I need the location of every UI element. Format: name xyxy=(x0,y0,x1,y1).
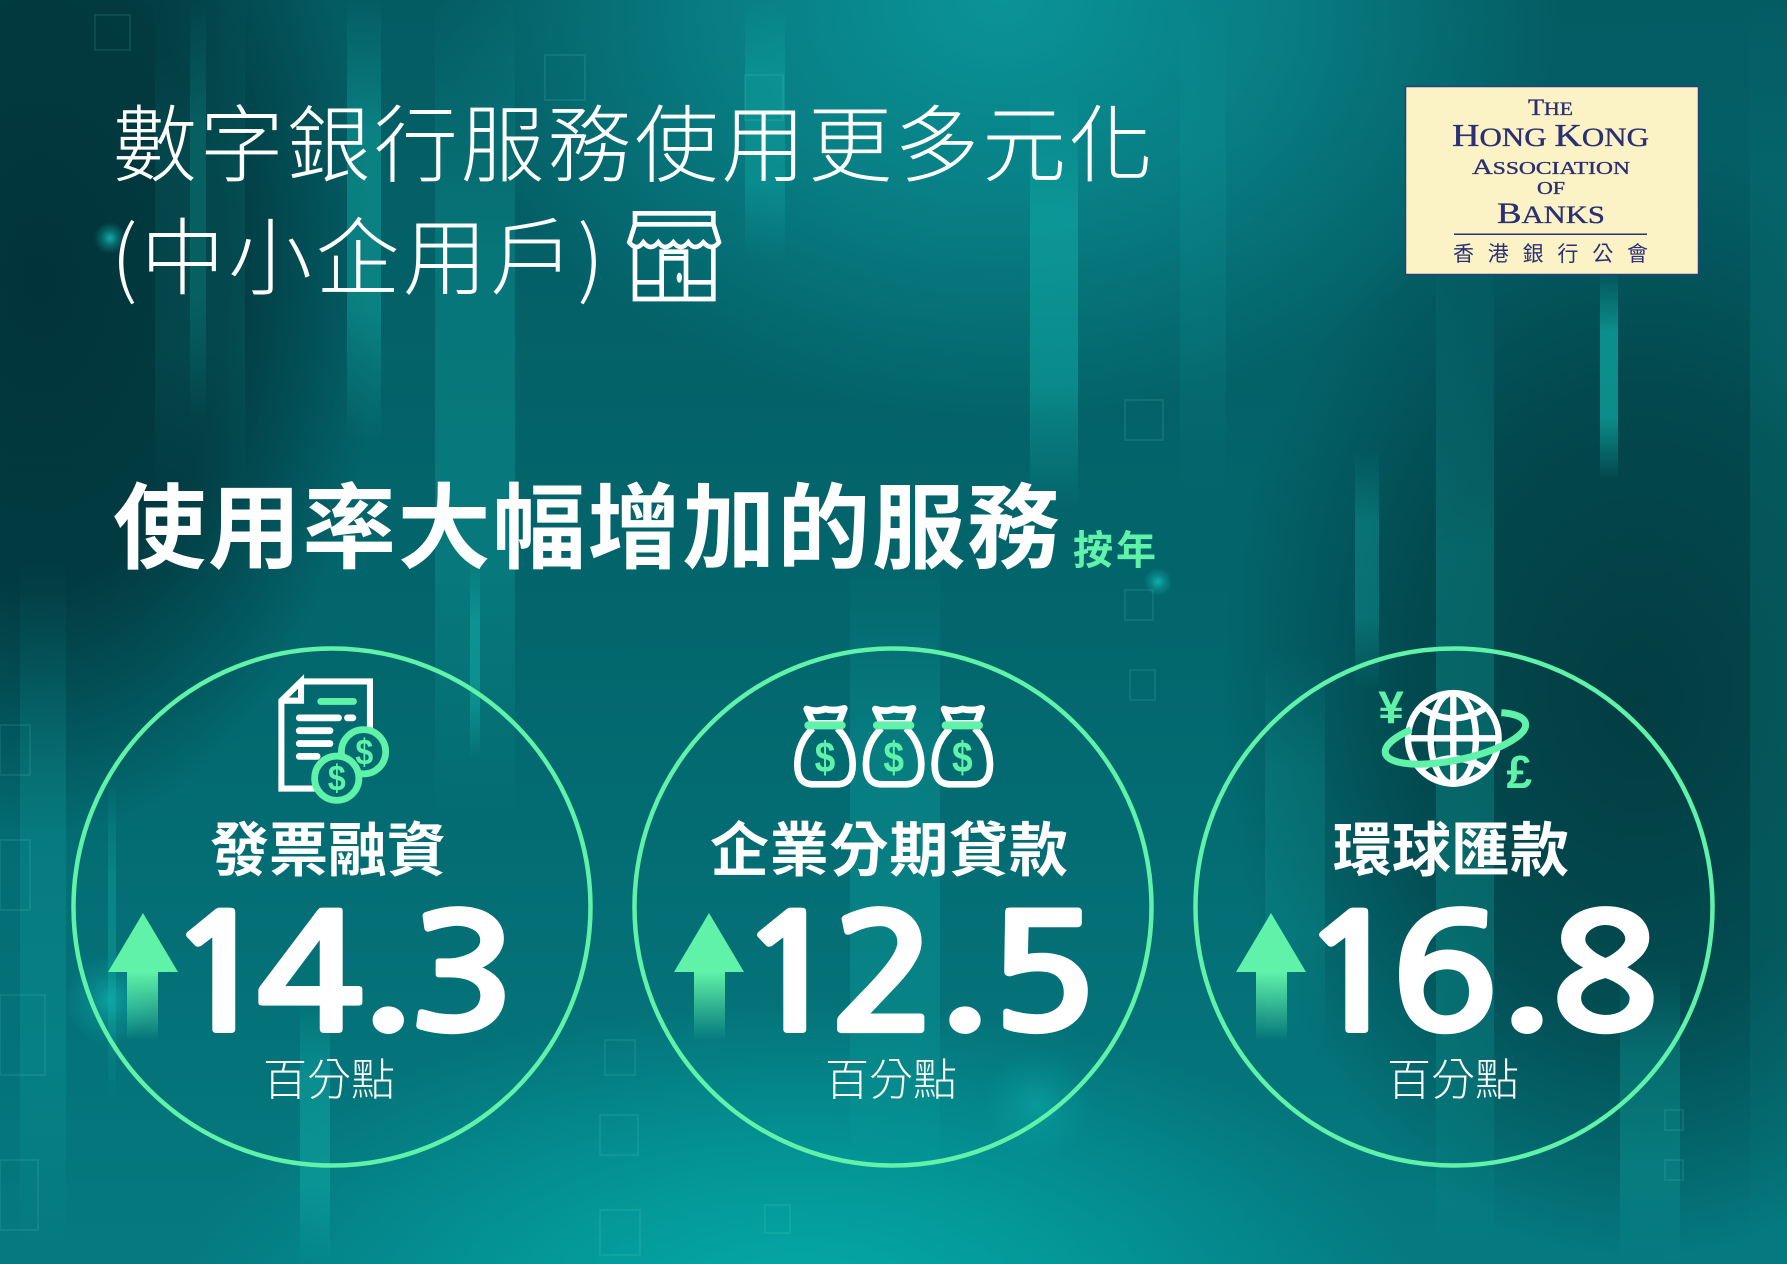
logo: OF xyxy=(1537,178,1565,198)
title: (中小企用戶) xyxy=(111,192,604,313)
logo xyxy=(1406,86,1698,274)
value: 14.3 xyxy=(164,886,518,1055)
logo: HONG KONG xyxy=(1452,117,1649,153)
label: 企業分期貸款 xyxy=(710,818,1068,884)
arrow up xyxy=(1236,913,1306,1040)
label: 發票融資 xyxy=(210,818,446,884)
title xyxy=(111,79,1153,313)
logo: BANKS xyxy=(1497,197,1605,230)
panel: global remittance xyxy=(1196,648,1712,1166)
heading note: 按年 xyxy=(1073,529,1156,573)
unit: 百分點 xyxy=(263,1056,395,1105)
icon: money bags: $ xyxy=(815,734,835,782)
label: 環球匯款 xyxy=(1333,818,1569,884)
logo: 香港銀行公會 xyxy=(1453,243,1648,266)
icon: invoice with coins xyxy=(281,681,386,800)
icon: invoice with coins: $ xyxy=(355,732,373,772)
panel: invoice financing xyxy=(74,648,590,1166)
arrow up xyxy=(108,913,178,1040)
icon: globe: ¥ xyxy=(1378,681,1404,733)
logo: THE xyxy=(1528,95,1573,120)
unit: 百分點 xyxy=(825,1056,957,1105)
arrow up xyxy=(674,913,744,1040)
logo: A SSOCIATION xyxy=(1472,154,1630,179)
value: 16.8 xyxy=(1297,886,1660,1055)
title: 數字銀行服務使用更多元化 xyxy=(113,79,1153,200)
unit: 百分點 xyxy=(1387,1056,1519,1105)
icon: money bags xyxy=(797,708,990,784)
value: 12.5 xyxy=(735,886,1098,1055)
icon: shop xyxy=(629,213,719,299)
icon: globe xyxy=(1378,681,1533,798)
heading: 使用率大幅增加的服務 xyxy=(113,477,1060,581)
icon: globe: £ xyxy=(1507,746,1533,798)
icon: money bags: $ xyxy=(883,734,904,782)
icon: money bags: $ xyxy=(952,734,973,782)
panel: instalment loans xyxy=(634,648,1152,1166)
icon: invoice with coins: $ xyxy=(328,758,346,798)
